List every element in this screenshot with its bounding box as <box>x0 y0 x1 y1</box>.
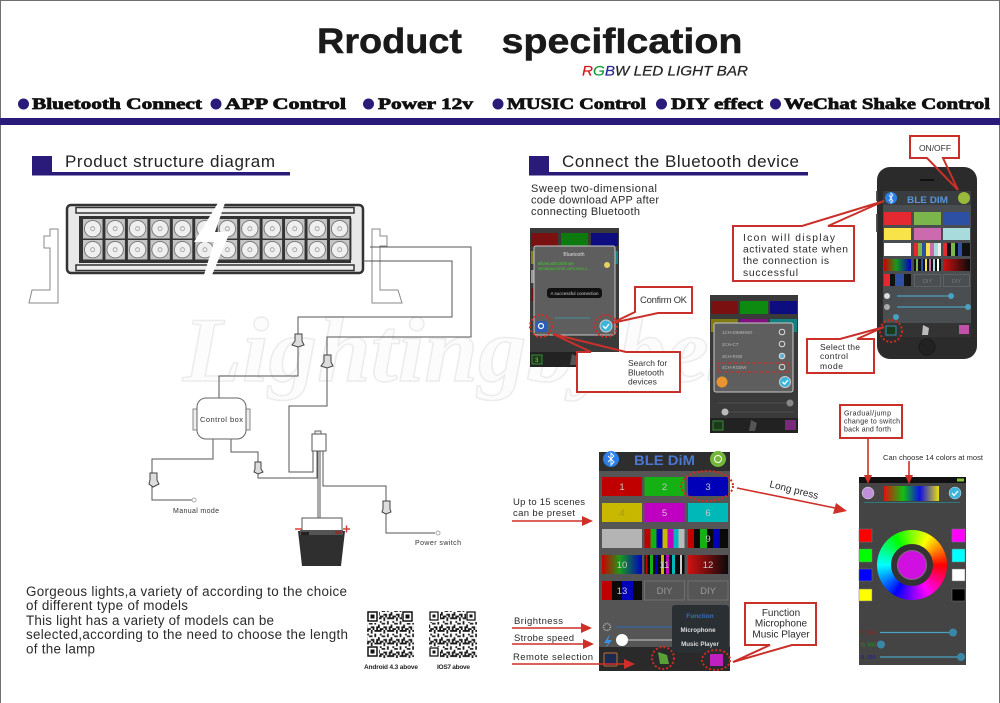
heading: product structure diagram <box>32 152 290 176</box>
scene tiles: 9 <box>705 534 711 545</box>
instruction text: connecting Bluetooth <box>531 206 640 218</box>
brightness slider <box>604 624 672 630</box>
wheel center button <box>891 544 933 586</box>
label: scenes <box>512 497 593 526</box>
callout: function menu: Function <box>762 608 800 619</box>
QR code: iOS <box>429 611 477 671</box>
scene tiles: 4 <box>619 508 625 519</box>
scene tiles: 10 <box>617 560 627 571</box>
phone screen: control mode list: 2CH-CT <box>722 342 739 347</box>
highlight on tile 3 <box>681 471 733 501</box>
function menu: Microphone <box>680 627 716 634</box>
instruction text: Sweep two-dimensional <box>531 183 657 195</box>
LED light bar <box>29 203 402 303</box>
callout: confirm OK: Confirm OK <box>640 295 688 306</box>
feature list: APP Control <box>225 96 347 113</box>
label: 14 colors <box>883 453 984 484</box>
battery <box>295 526 350 566</box>
feature list: Power 12v <box>378 96 473 113</box>
QR code: android: Android 4.3 above <box>364 664 418 671</box>
color picker screen <box>859 477 966 665</box>
callout: on/off <box>910 136 959 190</box>
label: manual mode: Manual mode <box>173 508 219 515</box>
feature list: Bluetooth Connect <box>32 96 203 113</box>
scene tiles <box>884 212 970 286</box>
color bar <box>884 486 939 501</box>
RGB sliders: G: 000 <box>861 642 876 648</box>
cancel button <box>716 376 728 388</box>
relay <box>312 431 326 451</box>
scene tiles: 3 <box>705 482 711 493</box>
app screen: scenes <box>599 451 733 671</box>
scene tiles: DIY <box>952 279 961 285</box>
callout: confirm OK <box>612 287 692 323</box>
callout: function menu: Music Player <box>752 630 810 640</box>
description text: Gorgeous lights,a variety of according to the choice <box>26 584 347 599</box>
callout: icon activated state: the connection is <box>743 256 829 267</box>
label: brightness: Brightness <box>514 616 563 627</box>
callout: on/off: ON/OFF <box>919 143 951 153</box>
QR code: android <box>364 611 418 671</box>
search button <box>536 321 547 332</box>
phone screen: control mode list: 1CH-DIMMING <box>722 330 753 335</box>
phone screen: control mode list <box>710 295 798 433</box>
callout: icon activated state: successful <box>743 268 798 279</box>
RGB sliders <box>861 628 965 661</box>
callout: search for bluetooth devices: devices <box>628 376 657 386</box>
connector <box>382 501 391 514</box>
scene tiles: DIY <box>923 279 932 285</box>
feature list <box>18 96 991 113</box>
label: scenes: Up to 15 scenes <box>513 497 585 508</box>
right bracket <box>372 229 402 303</box>
callout: search for bluetooth devices: Bluetooth <box>628 368 664 378</box>
connector <box>254 462 263 474</box>
app logo: BLE DiM <box>634 452 695 468</box>
function menu <box>672 605 729 653</box>
confirm button <box>600 320 612 332</box>
phone screen: bluetooth connection: A successful connection <box>550 291 599 296</box>
callout: search for bluetooth devices <box>553 334 680 392</box>
app logo: BLE DIM <box>907 195 948 206</box>
feature list: MUSIC Control <box>507 96 647 113</box>
callout: function menu <box>733 603 816 662</box>
scene tiles: 13 <box>617 586 627 597</box>
strobe slider <box>604 634 672 649</box>
dialog <box>714 323 793 392</box>
shake icon <box>652 647 674 669</box>
phone screen: control mode list: 3CH-RGB <box>722 354 742 359</box>
feature list: WeChat Shake Control <box>784 96 991 113</box>
sliders <box>884 293 971 320</box>
long press arrow: Long press <box>768 479 819 502</box>
header band <box>0 118 1000 125</box>
phone screen: bluetooth connection <box>530 228 619 367</box>
long press arrow <box>737 479 847 514</box>
LED grid <box>82 218 351 260</box>
title <box>317 22 742 61</box>
scene tiles: 1 <box>619 482 625 493</box>
function menu: Function <box>686 613 714 620</box>
phone screen: bluetooth connection: 9EDB8306-DFDE-43F5-0000-0... <box>538 267 590 271</box>
label: strobe speed <box>512 633 594 649</box>
callout: select control mode: mode <box>820 361 843 371</box>
label: power switch: Power switch <box>415 540 461 547</box>
label: remote selection <box>512 652 635 669</box>
callout: gradual/jump <box>840 405 902 484</box>
callout: select control mode: control <box>820 351 848 361</box>
callout: select control mode <box>807 327 884 373</box>
power icon <box>710 451 726 467</box>
scene tiles: 6 <box>705 508 711 519</box>
title: specifIcation <box>502 22 742 61</box>
color wheel <box>877 530 947 600</box>
callout: gradual/jump: change to switch <box>844 418 900 426</box>
RGB sliders: B: 255 <box>861 655 876 661</box>
smartphone <box>876 167 977 359</box>
description text <box>26 584 348 656</box>
music icon <box>702 650 730 670</box>
label: remote selection: Remote selection <box>513 652 593 663</box>
scene tiles: DIY <box>700 586 717 597</box>
heading: connect the bluetooth device: Connect the Bluetooth device <box>562 152 799 171</box>
confirm button <box>780 376 790 388</box>
confirm icon <box>949 487 961 499</box>
callout: search for bluetooth devices: Search for <box>628 358 667 368</box>
scene tiles <box>602 477 728 600</box>
control box <box>193 398 250 439</box>
phone screen: control mode list: 4CH-RGBW <box>722 365 747 370</box>
feature list: DIY effect <box>671 96 764 113</box>
instruction text: code download APP after <box>531 194 659 206</box>
connector <box>321 355 333 368</box>
scene tiles: 12 <box>703 560 713 571</box>
phone screen: bluetooth connection: 3 <box>535 358 539 364</box>
callout: function menu: Microphone <box>755 618 808 630</box>
selected row <box>718 363 789 372</box>
success pill <box>547 288 602 298</box>
subtitle: RGBW LED LIGHT BAR <box>582 62 748 78</box>
scene tiles: 5 <box>662 508 667 519</box>
phone screen: bluetooth connection: Bluetooth Dimmer <box>538 261 575 266</box>
label: 14 colors: Can choose 14 colors at most <box>883 453 984 462</box>
callout: icon activated state: Icon will display <box>743 233 836 244</box>
left bracket <box>29 229 58 303</box>
function menu: Music Player <box>681 641 720 648</box>
QR code: iOS: IOS7 above <box>437 664 470 671</box>
title: Rroduct <box>317 22 462 61</box>
control box: Control box <box>200 415 243 424</box>
break mark <box>194 203 230 275</box>
description text: selected,according to the need to choose the length <box>26 627 348 642</box>
watermark: Lightingbybest <box>182 299 776 401</box>
connector <box>149 473 159 487</box>
wiring <box>149 247 471 535</box>
label: scenes: can be preset <box>513 508 575 519</box>
callout: select control mode: Select the <box>820 342 860 352</box>
description text: of different type of models <box>26 598 188 613</box>
description text: of the lamp <box>26 642 95 656</box>
callout: gradual/jump: Gradual/jump <box>844 410 891 418</box>
description text: This light has a variety of models can be <box>26 613 274 628</box>
remote icon <box>604 653 617 666</box>
heading: connect the bluetooth device <box>529 152 808 176</box>
callout: icon activated state <box>733 201 884 281</box>
scene tiles: DIY <box>657 586 673 597</box>
phone screen: bluetooth connection: Bluetooth <box>563 252 585 258</box>
scene tiles: 11 <box>660 560 669 571</box>
dialog <box>534 246 615 335</box>
screen <box>883 191 971 337</box>
RGB sliders: R: 255 <box>861 630 876 636</box>
bluetooth icon <box>885 192 897 204</box>
label: strobe speed: Strobe speed <box>514 633 574 644</box>
gradual/jump icon <box>862 487 874 499</box>
callout: gradual/jump: back and forth <box>844 426 891 434</box>
bluetooth icon <box>603 451 619 467</box>
scene tiles: 2 <box>662 482 667 493</box>
connector <box>292 334 304 347</box>
polarity marks <box>295 526 350 532</box>
instruction text <box>531 183 659 218</box>
label: brightness <box>512 616 592 633</box>
heading: product structure diagram: Product structure diagram <box>65 152 275 171</box>
preset swatches <box>859 529 965 601</box>
callout: icon activated state: activated state when <box>743 244 848 256</box>
power icon <box>958 192 970 204</box>
